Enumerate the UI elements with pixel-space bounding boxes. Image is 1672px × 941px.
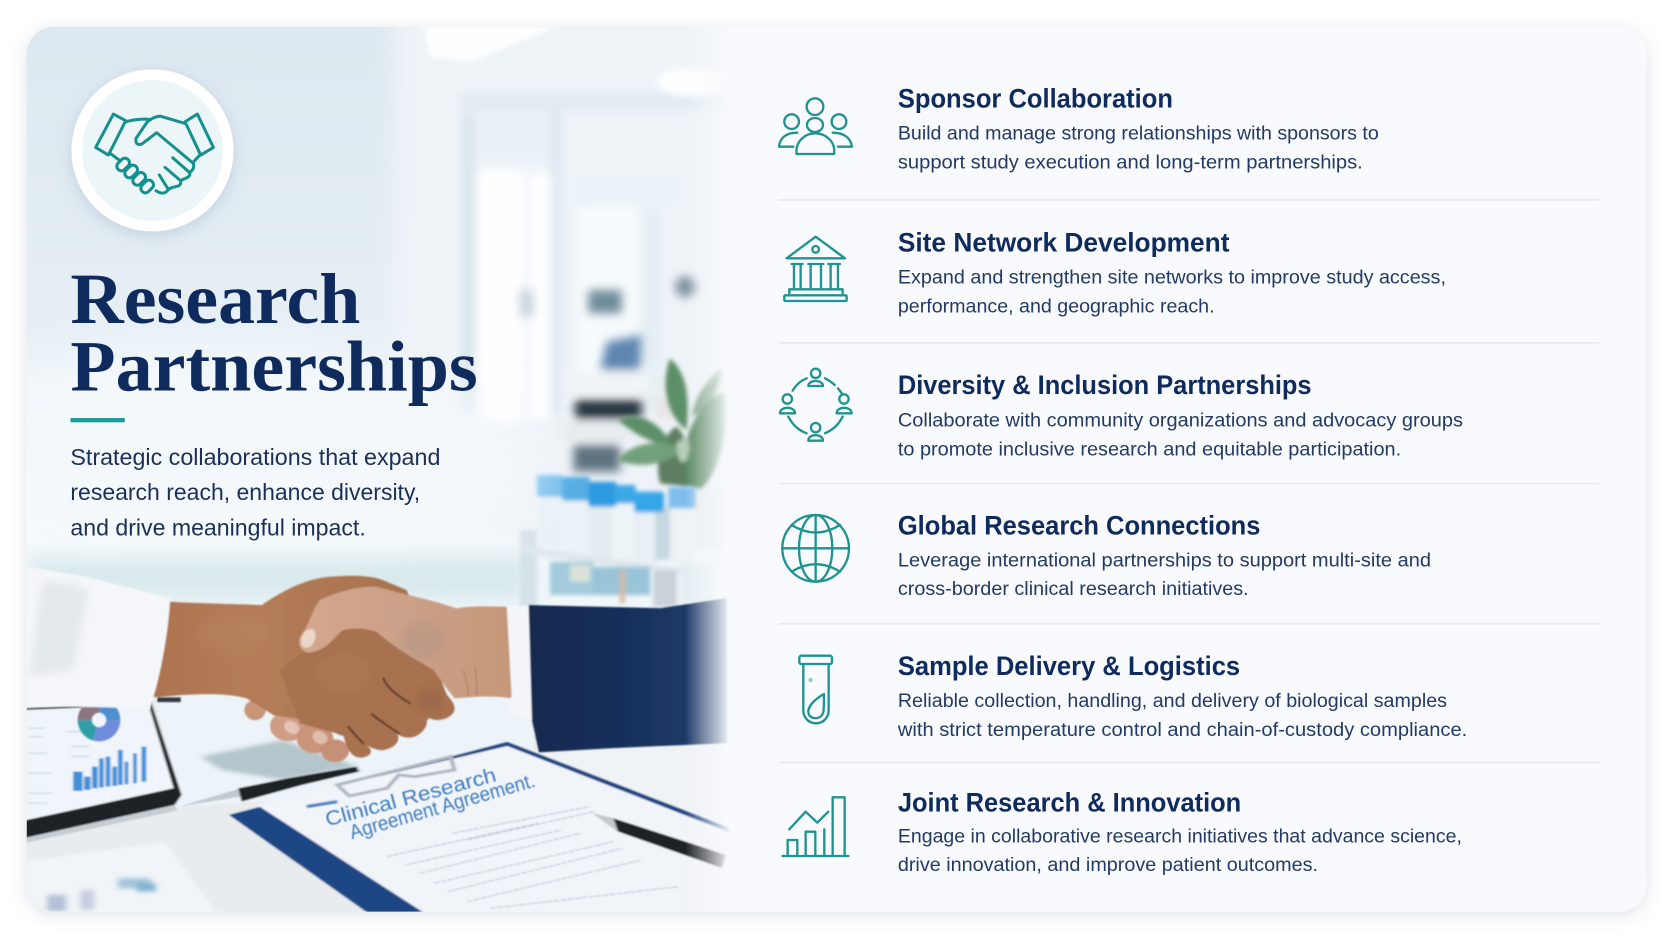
item: Joint Research & Innovation: [783, 788, 1462, 876]
description: Reliable collection, handling, and delivery of biological samples: [898, 691, 1447, 712]
heading: Diversity & Inclusion Partnerships: [898, 370, 1312, 400]
description: support study execution and long-term partnerships.: [898, 153, 1363, 174]
hands, sleeves and tablet donut: [27, 567, 727, 762]
soft light behind text: [27, 350, 558, 497]
icon badge: handshake: [71, 69, 234, 231]
white shirt cuff: [506, 604, 534, 720]
intro text: and drive meaningful impact.: [70, 514, 366, 540]
heading: Joint Research & Innovation: [898, 788, 1241, 818]
tablet bar chart: [73, 747, 146, 791]
item: Site Network Development: [784, 228, 1446, 317]
heading: Site Network Development: [898, 228, 1230, 258]
table, tablet and clipboard: [24, 687, 731, 913]
intro text: Strategic collaborations that expand: [70, 444, 440, 470]
thumb nail: [300, 628, 316, 648]
right hand and wrist: [299, 587, 512, 698]
left hand fingertips: [244, 700, 266, 720]
title: [70, 258, 478, 406]
laptop: [201, 740, 359, 780]
description: drive innovation, and improve patient outcomes.: [898, 855, 1318, 876]
document heading text on clipboard: Clinical Research: [323, 764, 499, 831]
tablet: [24, 702, 182, 838]
loose papers: [27, 844, 212, 912]
description: Leverage international partnerships to support multi-site and: [898, 550, 1431, 571]
window strip behind hands: [27, 557, 528, 599]
icon: institution building: [784, 237, 847, 301]
description: with strict temperature control and chain-of-custody compliance.: [897, 720, 1467, 741]
description: to promote inclusive research and equitable participation.: [898, 439, 1401, 460]
accent rule: [70, 418, 125, 422]
item: Sample Delivery & Logistics: [799, 651, 1467, 741]
left hand fingers: [280, 629, 455, 758]
navy jacket sleeve: [529, 598, 727, 752]
intro text: research reach, enhance diversity,: [70, 479, 420, 505]
tablet donut chart: [85, 706, 113, 734]
description: cross-border clinical research initiatives.: [898, 579, 1249, 600]
left arm and hand: [153, 576, 450, 740]
description: Collaborate with community organizations and advocacy groups: [898, 411, 1463, 432]
heading: Sponsor Collaboration: [898, 84, 1173, 114]
icon: test tube: [799, 656, 832, 723]
clipboard: [229, 742, 731, 913]
clipboard clip: [337, 757, 454, 796]
item: Diversity & Inclusion Partnerships: [780, 369, 1463, 460]
vials: [537, 475, 696, 567]
icon: circle of people: [780, 369, 852, 441]
document heading text on clipboard: Agreement Agreement.: [347, 770, 538, 844]
description: [898, 411, 1463, 460]
description: [897, 691, 1467, 741]
heading: Global Research Connections: [898, 510, 1260, 540]
description: [898, 268, 1446, 317]
document lines: [387, 807, 679, 908]
description: [898, 550, 1431, 600]
vial rack: [520, 530, 713, 610]
photo right fade: [685, 27, 732, 912]
icon: globe: [782, 515, 849, 582]
intro text: [70, 444, 440, 540]
blurred lab background: equipment, plant and vials: [520, 276, 726, 610]
left white shirt sleeve: [27, 567, 171, 709]
divider lines: [778, 200, 1599, 762]
panel: photo of handshake in a laboratory: [26, 27, 730, 912]
pen on document: [594, 814, 727, 868]
description: Engage in collaborative research initiatives that advance science,: [898, 826, 1462, 847]
blurred lab windows: [394, 27, 720, 424]
description: [898, 826, 1462, 876]
description: Expand and strengthen site networks to improve study access,: [898, 268, 1446, 289]
icon: people group: [779, 98, 852, 154]
pen on table: [238, 767, 359, 802]
table: [26, 701, 537, 912]
description: [898, 124, 1379, 174]
title: Research: [70, 258, 360, 339]
heading: Sample Delivery & Logistics: [898, 651, 1240, 681]
title: Partnerships: [70, 325, 478, 406]
item: Global Research Connections: [782, 510, 1431, 600]
description: Build and manage strong relationships with sponsors to: [898, 124, 1379, 145]
description: performance, and geographic reach.: [898, 296, 1215, 317]
icon: growth chart: [783, 797, 848, 856]
item: Sponsor Collaboration: [779, 84, 1379, 174]
